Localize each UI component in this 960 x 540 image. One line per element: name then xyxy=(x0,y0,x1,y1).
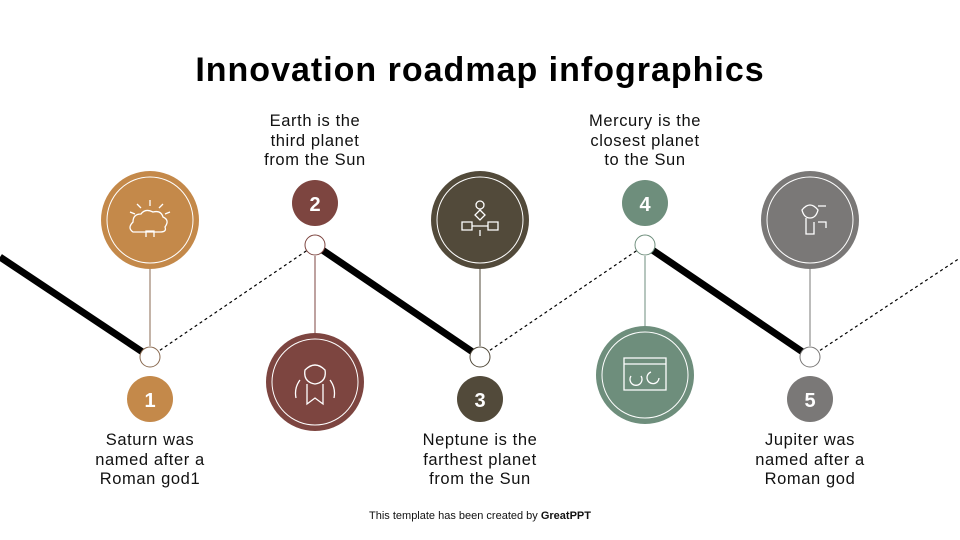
milestone 1: 1 xyxy=(144,390,156,412)
text 3: from the Sun xyxy=(429,470,531,488)
text 5 xyxy=(755,431,865,488)
milestone 4: 4 xyxy=(639,194,651,216)
text 2 xyxy=(264,112,366,169)
milestone 2 xyxy=(266,180,364,431)
milestone 5 xyxy=(761,171,859,422)
text 1: named after a xyxy=(95,450,205,468)
milestone 3 xyxy=(431,171,529,422)
milestone 3: 3 xyxy=(474,390,486,412)
text 3 xyxy=(423,431,537,488)
milestone 5: 5 xyxy=(804,390,816,412)
connectors xyxy=(150,256,810,346)
text 1 xyxy=(95,431,205,488)
text 4: closest planet xyxy=(590,132,700,150)
text 1: Saturn was xyxy=(106,431,194,449)
text 5: Jupiter was xyxy=(765,431,855,449)
text 2: third planet xyxy=(271,132,359,150)
text 3: Neptune is the xyxy=(423,431,537,449)
text 2: Earth is the xyxy=(270,112,360,130)
footer: This template has been created by GreatPPT xyxy=(369,510,591,522)
milestone 1 xyxy=(101,171,199,422)
path line xyxy=(0,245,960,357)
text 5: named after a xyxy=(755,450,865,468)
text 4: to the Sun xyxy=(604,151,686,169)
text 5: Roman god xyxy=(765,470,855,488)
text 4 xyxy=(589,112,701,169)
text 3: farthest planet xyxy=(423,450,537,468)
text 1: Roman god1 xyxy=(100,470,200,488)
milestone 4 xyxy=(596,180,694,424)
text 2: from the Sun xyxy=(264,151,366,169)
title: Innovation roadmap infographics xyxy=(195,51,765,89)
text 4: Mercury is the xyxy=(589,112,701,130)
milestone 2: 2 xyxy=(309,194,321,216)
